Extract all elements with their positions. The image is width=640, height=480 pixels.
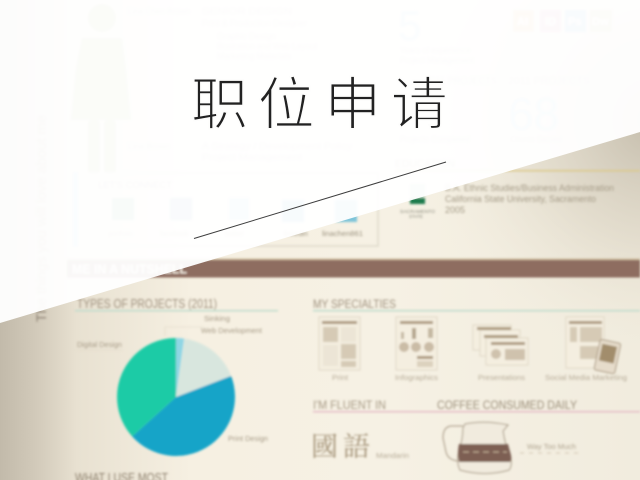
heading: fluent in: I'M FLUENT IN [313,398,386,412]
profile text: SENIOR DESIGN [202,6,292,16]
social labels: portfolio [108,231,133,238]
panel: connect [73,172,378,247]
banner: me in a nutshell [67,258,640,278]
specialty icon: print [319,317,360,370]
experience caption: Project Management [400,56,475,65]
heading: coffee: COFFEE CONSUMED DAILY [437,398,577,412]
education text: 2005 [445,205,465,215]
education text: California State University, Sacramento [445,194,596,204]
connect heading: LET'S CONNECT [98,180,172,191]
education text: B.A. Ethnic Studies/Business Administration [445,183,614,193]
specialty icon: social media [566,317,621,374]
social labels: linachen861 [322,231,363,238]
projects stat: 2011 PROJECTS [508,76,590,87]
pie labels: Digital Design [77,340,122,349]
profile text: Lina Brown [128,141,171,151]
university logo: STATE [409,214,423,219]
profile text: A Strategy / Development Policy [202,141,353,151]
title: 职位申请 [191,59,457,141]
experience number: 5 [398,2,421,49]
heading: types of projects: TYPES OF PROJECTS (2011) [77,297,217,311]
coffee label: Way Too Much [527,442,576,451]
white diagonal overlay [0,0,640,323]
software badges: AI [517,16,528,28]
rule [313,310,640,312]
mandarin characters: 國語 [311,425,375,464]
social labels: linkedin [284,231,308,238]
stat number 68: 68 [508,88,559,140]
specialty icon: infographics [396,317,437,370]
experience caption: Years of experience [400,46,471,55]
social icons [112,198,357,222]
software badges [513,10,612,32]
banner: me in a nutshell: ME IN A NUTSHELL [72,262,187,276]
specialty labels: Infographics [395,373,438,382]
pie labels: Sinking [204,314,230,323]
profile text: Print & Production Designer [202,18,307,28]
social labels: twitter [225,231,244,238]
pie labels: Print Design [228,434,268,443]
projects stat: 2011 PROJECTS [425,76,497,87]
rule [75,310,278,312]
education rule [395,170,640,172]
coffee pot [443,422,511,474]
education heading: EDUCATION [395,159,455,170]
pie chart [117,338,235,456]
university logo [400,184,436,219]
profile text [128,6,353,162]
specialty labels: Print [332,373,348,382]
specialty labels: Social Media Marketing [545,373,627,382]
projects stat: Projects Completed [400,135,470,144]
specialty labels: Presentations [478,373,525,382]
profile text: Graphic Design [217,31,276,41]
projects stat [400,76,590,144]
education text [445,183,614,215]
university logo: SACRAMENTO [400,209,436,214]
experience caption [400,46,475,65]
software badges: Dw [592,16,609,28]
social labels [108,231,363,238]
software badges: Ps [568,16,581,28]
profile text: Illustration and Web Layout [217,41,318,51]
phone [594,339,621,374]
pie labels: Web Development [201,326,263,335]
social labels: facebook [160,231,189,238]
diagonal accent line [194,162,446,238]
figure icon [71,4,131,174]
specialty labels [332,373,627,382]
projects stat: Clients Served [510,135,562,144]
mandarin label: Mandarin [376,451,409,460]
pie labels [77,314,268,443]
rule [313,411,640,412]
side heading: The things you will love about me [33,115,49,322]
profile text: Project Management [202,152,303,162]
software badges: ID [545,16,556,28]
specialty icon: presentations [473,325,528,365]
profile text: Lina Chen-Brown [128,6,190,16]
heading: my specialties: MY SPECIALTIES [313,297,396,311]
profile text: Marketing Materials [217,51,291,61]
